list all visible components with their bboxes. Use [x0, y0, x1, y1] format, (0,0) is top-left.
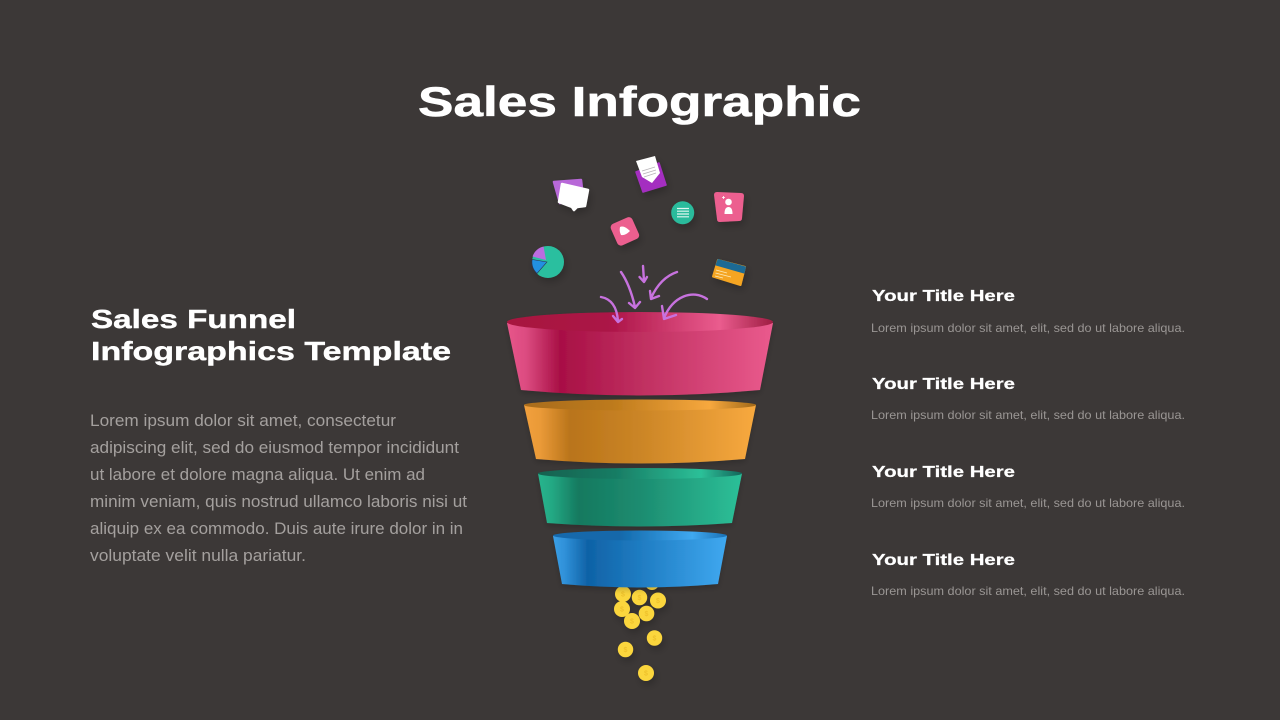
coins: $ — [621, 592, 625, 598]
list item 1: Your Title Here — [872, 288, 1015, 305]
left paragraph: aliquip ex ea commodo. Duis aute irure dolor in in — [90, 519, 463, 538]
list item 4: Your Title Here — [872, 552, 1015, 569]
coins: $ — [653, 636, 657, 642]
icon: pink person card — [714, 192, 744, 222]
arrows into funnel — [601, 266, 707, 322]
list item 3 — [871, 464, 1185, 510]
left paragraph: ut labore et dolore magna aliqua. Ut enim ad — [90, 465, 425, 484]
list item 1: Lorem ipsum dolor sit amet, elit, sed do ut labore aliqua. — [871, 321, 1185, 335]
icon: credit card — [713, 260, 746, 285]
left paragraph — [90, 411, 467, 565]
list item 2 — [871, 376, 1185, 422]
funnel tier: pink — [507, 312, 773, 396]
left paragraph: adipiscing elit, sed do eiusmod tempor incididunt — [90, 438, 459, 457]
icon: envelope — [636, 156, 666, 192]
list item 2: Lorem ipsum dolor sit amet, elit, sed do ut labore aliqua. — [871, 408, 1185, 422]
icon: chat bubbles — [554, 180, 588, 210]
list item 1 — [871, 288, 1185, 335]
coins: $ — [645, 611, 649, 618]
list item 3: Lorem ipsum dolor sit amet, elit, sed do ut labore aliqua. — [871, 496, 1185, 510]
coins: $ — [638, 595, 642, 602]
icon: pink heart tile — [609, 216, 640, 247]
funnel tier: blue — [553, 530, 727, 588]
left paragraph: Lorem ipsum dolor sit amet, consectetur — [90, 411, 396, 430]
list item 2: Your Title Here — [872, 376, 1015, 393]
left paragraph: voluptate velit nulla pariatur. — [90, 546, 306, 565]
left heading: Sales Funnel — [91, 304, 296, 334]
coins: $ — [620, 606, 624, 614]
left heading — [91, 304, 451, 366]
list item 4: Lorem ipsum dolor sit amet, elit, sed do ut labore aliqua. — [871, 584, 1185, 598]
coins — [614, 576, 666, 681]
list item 3: Your Title Here — [872, 464, 1015, 481]
coins: $ — [656, 598, 660, 605]
funnel tier: green — [538, 468, 742, 526]
icon: teal list circle — [671, 201, 694, 224]
funnel tier: orange — [524, 400, 756, 464]
coins: $ — [624, 647, 628, 654]
coins: $ — [630, 618, 634, 626]
left paragraph: minim veniam, quis nostrud ullamco laboris nisi ut — [90, 492, 467, 511]
list item 4 — [871, 552, 1185, 598]
coins: $ — [644, 670, 648, 678]
icon: pie chart — [532, 246, 564, 278]
title: Sales Infographic — [418, 78, 861, 125]
left heading: Infographics Template — [91, 336, 451, 366]
funnel — [507, 312, 773, 588]
